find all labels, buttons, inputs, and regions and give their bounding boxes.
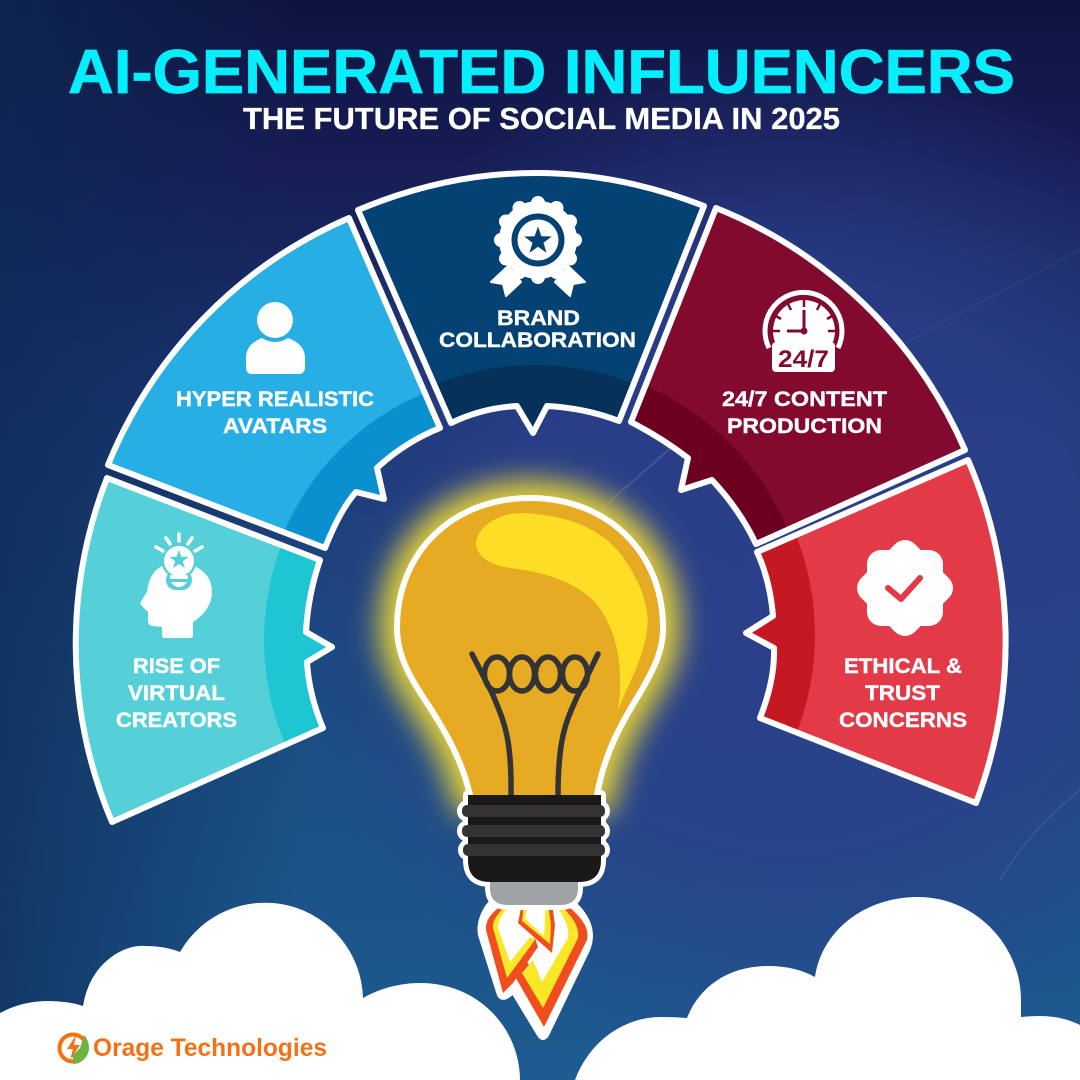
label: rise of virtual creators: VIRTUAL	[128, 681, 225, 705]
icon: award badge	[491, 196, 585, 296]
label: ethical and trust concerns	[839, 654, 967, 732]
label: rise of virtual creators: RISE OF	[133, 654, 220, 678]
logo: Orage Technologies: Orage Technologies	[93, 1034, 327, 1062]
label: rise of virtual creators: CREATORS	[116, 708, 237, 732]
icon: verified check badge	[851, 534, 959, 642]
bulb glow	[397, 498, 663, 795]
icon: 24/7 clock: 24/7	[778, 346, 829, 373]
label: brand collaboration: COLLABORATION	[439, 328, 636, 352]
label: ethical and trust concerns: ETHICAL &	[844, 654, 962, 678]
label: 24/7 content production: 24/7 CONTENT	[722, 387, 887, 411]
label: hyper realistic avatars: HYPER REALISTIC	[176, 387, 374, 411]
label: 24/7 content production	[722, 387, 887, 438]
label: ethical and trust concerns: TRUST	[865, 681, 940, 705]
bulb glass	[397, 498, 663, 802]
label: hyper realistic avatars	[176, 387, 374, 438]
label: ethical and trust concerns: CONCERNS	[839, 708, 967, 732]
icon: head with lightbulb	[140, 534, 212, 638]
label: rise of virtual creators	[116, 654, 237, 732]
panel: rise of virtual creators	[72, 475, 335, 825]
filament	[472, 654, 598, 796]
panel: brand collaboration	[355, 170, 707, 436]
panel: 24/7 content production	[628, 205, 968, 547]
logo mark	[60, 1034, 89, 1064]
icon: person	[246, 302, 305, 374]
panel: ethical and trust concerns	[743, 457, 1009, 806]
panel: hyper realistic avatars	[105, 215, 443, 551]
label: 24/7 content production: PRODUCTION	[727, 414, 882, 438]
flames	[479, 902, 591, 1038]
screw base	[462, 795, 605, 905]
lightbulb rocket	[397, 498, 663, 1038]
bulb highlight	[476, 513, 648, 710]
clouds	[0, 897, 1080, 1080]
base outline	[462, 795, 605, 905]
label: hyper realistic avatars: AVATARS	[223, 414, 327, 438]
icon: 24/7 clock	[765, 292, 842, 373]
label: brand collaboration	[439, 306, 636, 352]
title: AI-GENERATED INFLUENCERS	[68, 38, 1015, 107]
label: brand collaboration: BRAND	[497, 306, 580, 330]
subtitle: THE FUTURE OF SOCIAL MEDIA IN 2025	[243, 101, 840, 136]
